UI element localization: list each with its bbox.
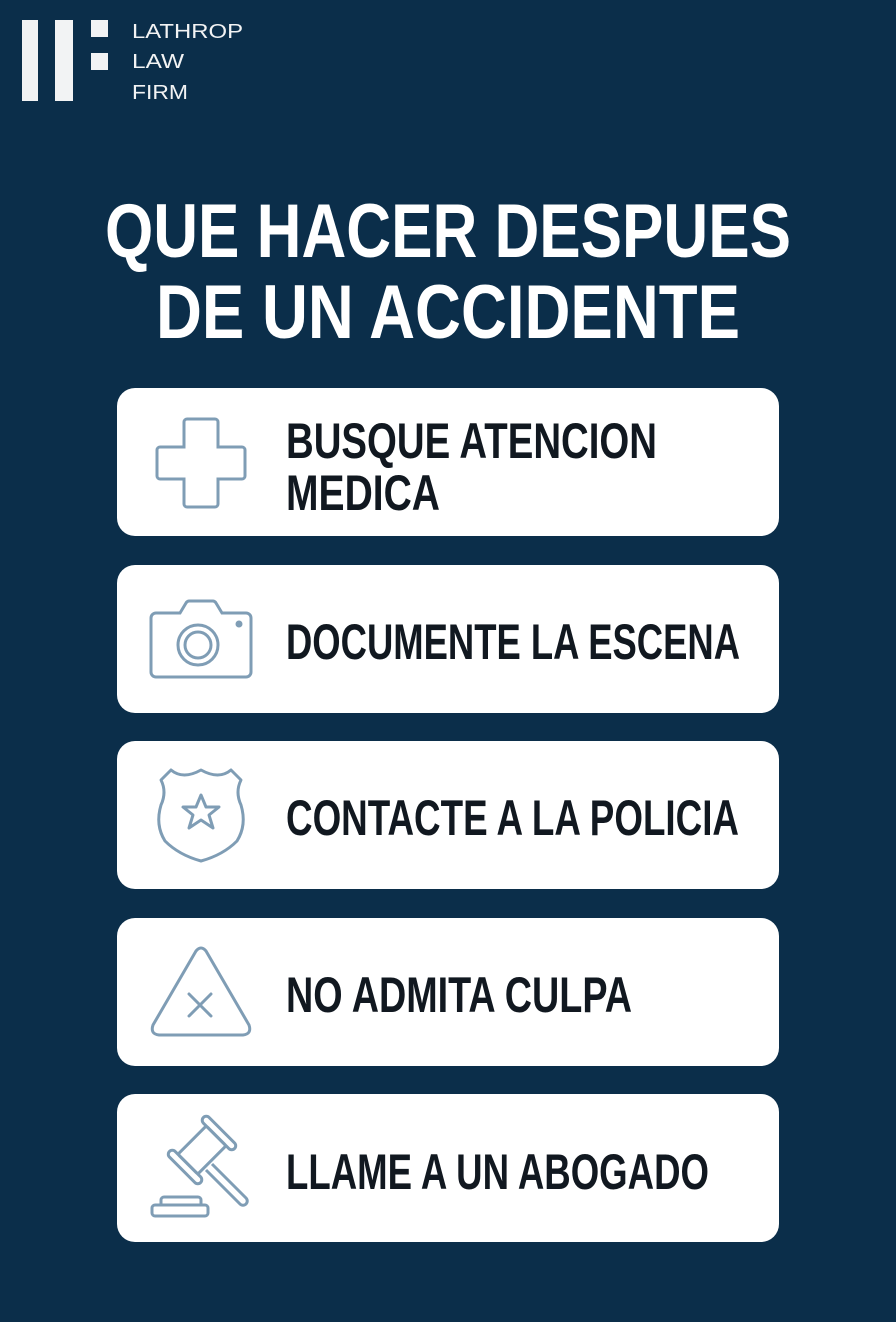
card 2: camera: DOCUMENTE LA ESCENA [286, 614, 740, 670]
logo: LATHROP [132, 21, 243, 43]
card 1: medical: BUSQUE ATENCION [286, 413, 657, 469]
icon: police badge [159, 770, 243, 861]
icon: warning triangle [152, 948, 250, 1035]
card 5: lawyer [117, 1094, 779, 1242]
logo: LAW [132, 51, 184, 73]
icon: medical cross [157, 419, 245, 507]
card 1: medical: MEDICA [286, 465, 440, 521]
card 3: police: CONTACTE A LA POLICIA [286, 790, 739, 846]
card 2: camera [117, 565, 779, 713]
icon: camera [151, 601, 251, 677]
logo [22, 20, 243, 104]
card 5: lawyer: LLAME A UN ABOGADO [286, 1144, 709, 1200]
card 3: police [117, 741, 779, 889]
logo: FIRM [132, 82, 188, 104]
title: DE UN ACCIDENTE [156, 270, 740, 355]
card 1: medical [117, 388, 779, 536]
title [105, 189, 791, 355]
card 4: no admit [117, 918, 779, 1066]
card 4: no admit: NO ADMITA CULPA [286, 967, 632, 1023]
icon: gavel [152, 1115, 247, 1216]
